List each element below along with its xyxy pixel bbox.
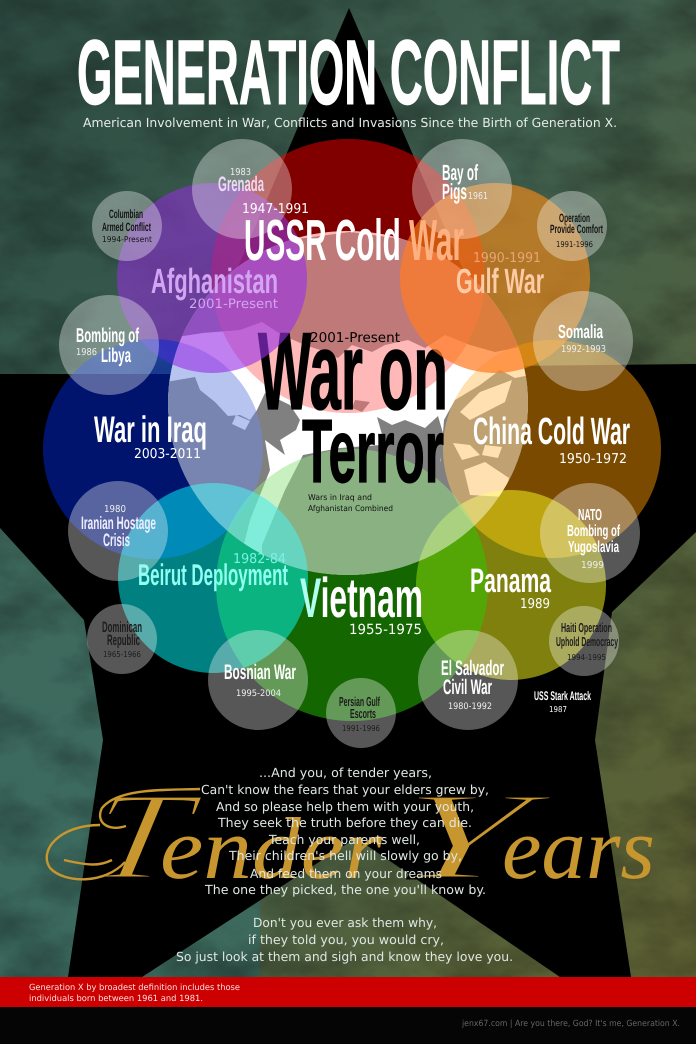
poem lyrics: Don't you ever ask them why, xyxy=(253,915,437,930)
label: USSR Cold War: USSR Cold War xyxy=(244,208,464,273)
label: Beirut Deployment: Beirut Deployment xyxy=(138,559,288,592)
War on Terror heading: War on xyxy=(258,310,448,433)
label: Persian Gulf Escorts: Escorts xyxy=(350,706,376,721)
War on Terror heading: Terror xyxy=(302,402,444,502)
label: Afghanistan: Afghanistan xyxy=(151,262,278,301)
label: Bay of Pigs xyxy=(442,160,488,204)
label: NATO Bombing of Yugoslavia: Bombing of xyxy=(567,523,620,540)
label: China Cold War: 1950-1972 xyxy=(559,451,627,467)
label: El Salvador Civil War xyxy=(441,657,504,712)
label: Vietnam: Vietnam xyxy=(300,566,423,629)
label: Haiti Operation Uphold Democracy: Haiti Operation xyxy=(561,620,612,635)
central globe world map xyxy=(160,231,530,590)
label: Grenada xyxy=(218,167,264,196)
poem lyrics: ...And you, of tender years, xyxy=(259,765,432,780)
label: Iranian Hostage Crisis xyxy=(81,504,156,550)
red definition band: individuals born between 1961 and 1981. xyxy=(29,994,203,1004)
script heading: Tender Years: ears xyxy=(502,801,655,898)
label: Panama: 1989 xyxy=(520,596,550,612)
label: Beirut Deployment: 1982-84 xyxy=(233,551,286,567)
label: NATO Bombing of Yugoslavia: Yugoslavia xyxy=(568,539,619,556)
red definition band xyxy=(0,977,696,1007)
label: Somalia xyxy=(558,322,606,355)
label: Columbian Armed Conflict: 1994-Present xyxy=(102,235,152,244)
label: Operation Provide Comfort xyxy=(550,211,603,249)
label: Bombing of Libya xyxy=(76,325,139,367)
label: Columbian Armed Conflict xyxy=(102,207,152,244)
poem lyrics: Their children's hell will slowly go by, xyxy=(228,848,462,863)
label: Operation Provide Comfort: Operation xyxy=(559,211,590,225)
label: Dominican Republic: 1965-1966 xyxy=(103,650,141,659)
label: Vietnam xyxy=(300,566,423,638)
label: Gulf War: Gulf War xyxy=(456,262,544,301)
label: Somalia: Somalia xyxy=(558,322,603,343)
label: Iranian Hostage Crisis: 1980 xyxy=(104,504,126,515)
upper circle tints over heading xyxy=(172,240,524,373)
label: Persian Gulf Escorts: Persian Gulf xyxy=(339,694,380,709)
label: NATO Bombing of Yugoslavia: 1999 xyxy=(581,560,604,571)
script heading: Tender Years: ender xyxy=(160,801,383,898)
poem lyrics: if they told you, you would cry, xyxy=(248,932,444,947)
poem lyrics: They seek the truth before they can die. xyxy=(217,815,472,830)
label: El Salvador Civil War: El Salvador xyxy=(441,657,504,680)
label: Haiti Operation Uphold Democracy: Uphold Democracy xyxy=(556,634,618,649)
label: Iranian Hostage Crisis: Iranian Hostage xyxy=(81,513,156,533)
label: NATO Bombing of Yugoslavia: NATO xyxy=(578,507,602,524)
War on Terror heading xyxy=(258,310,448,513)
label: Persian Gulf Escorts: 1991-1996 xyxy=(342,724,380,733)
label: Haiti Operation Uphold Democracy xyxy=(556,620,618,662)
label: Dominican Republic xyxy=(102,619,142,659)
small grey event circles xyxy=(59,139,640,748)
label: Vietnam: 1955-1975 xyxy=(349,622,422,638)
label: Persian Gulf Escorts xyxy=(339,694,380,733)
label: USSR Cold War: 1947-1991 xyxy=(242,201,309,217)
War on Terror heading: Afghanistan Combined xyxy=(308,504,393,513)
label: USS Stark Attack: 1987 xyxy=(549,705,567,714)
poem lyrics: Can't know the fears that your elders grew by, xyxy=(201,782,489,797)
red definition band: Generation X by broadest definition includes those xyxy=(29,983,240,993)
label: Bosnian War: Bosnian War xyxy=(224,661,296,684)
label: Operation Provide Comfort: Provide Comfort xyxy=(550,222,603,236)
label: Afghanistan xyxy=(151,262,278,312)
label: USSR Cold War xyxy=(242,201,464,273)
label: Afghanistan: 2001-Present xyxy=(189,297,278,312)
poem lyrics: So just look at them and sigh and know they love you. xyxy=(176,949,513,964)
label: Iranian Hostage Crisis: Crisis xyxy=(103,530,130,550)
subtitle: American Involvement in War, Conflicts and Invasions Since the Birth of Generation X. xyxy=(83,115,617,130)
label: China Cold War xyxy=(473,411,630,467)
script heading: Tender Years: Y xyxy=(383,768,559,906)
label: Bay of Pigs: 1961 xyxy=(468,191,488,202)
label: Dominican Republic: Republic xyxy=(107,632,140,649)
tinted circle overlaps on globe xyxy=(168,231,528,575)
label: Gulf War xyxy=(456,250,544,301)
War on Terror heading: Wars in Iraq and xyxy=(308,493,372,502)
label: USS Stark Attack: USS Stark Attack xyxy=(534,689,591,703)
label: USS Stark Attack xyxy=(534,689,591,714)
footer bar: jenx67.com | Are you there, God? It's me, Generation X. xyxy=(461,1019,680,1029)
poem lyrics: And so please help them with your youth, xyxy=(216,799,474,814)
label: Bosnian War xyxy=(224,661,296,699)
label: Grenada: 1983 xyxy=(230,167,251,178)
label: Panama xyxy=(470,562,552,612)
label: Bombing of Libya: 1986 xyxy=(76,347,97,358)
label: Dominican Republic: Dominican xyxy=(102,619,142,636)
label: Columbian Armed Conflict: Columbian xyxy=(109,207,143,221)
label: Haiti Operation Uphold Democracy: 1994-1995 xyxy=(567,653,606,662)
label: Grenada: Grenada xyxy=(218,173,264,196)
label: Beirut Deployment xyxy=(138,551,288,592)
label: Somalia: 1992-1993 xyxy=(561,344,606,355)
label: El Salvador Civil War: Civil War xyxy=(443,676,492,699)
poem lyrics: Teach your parents well, xyxy=(268,832,420,847)
poem lyrics: The one they picked, the one you'll know by. xyxy=(204,882,486,897)
script heading: Tender Years: T xyxy=(79,768,209,906)
label: War in Iraq: 2003-2011 xyxy=(134,446,201,462)
label: Gulf War: 1990-1991 xyxy=(473,250,541,266)
label: Operation Provide Comfort: 1991-1996 xyxy=(556,240,593,249)
label: Panama: Panama xyxy=(470,562,552,600)
poem lyrics xyxy=(176,765,513,964)
label: NATO Bombing of Yugoslavia xyxy=(567,507,620,571)
label: War in Iraq: War in Iraq xyxy=(94,409,207,450)
label: El Salvador Civil War: 1980-1992 xyxy=(448,702,492,712)
War on Terror heading: 2001-Present xyxy=(310,330,400,346)
label: Bosnian War: 1995-2004 xyxy=(236,689,281,699)
label: Columbian Armed Conflict: Armed Conflict xyxy=(102,220,151,234)
label: War in Iraq xyxy=(94,409,207,462)
label: Bay of Pigs: Pigs xyxy=(442,179,467,204)
label: Bombing of Libya: Bombing of xyxy=(76,325,139,347)
label: Bay of Pigs: Bay of xyxy=(442,160,478,185)
large colour circles over background xyxy=(43,139,661,721)
footer bar xyxy=(0,1007,696,1044)
script heading: Tender Years xyxy=(47,768,655,906)
label: Bombing of Libya: Libya xyxy=(101,345,131,367)
poem lyrics: And feed them on your dreams xyxy=(250,866,442,881)
